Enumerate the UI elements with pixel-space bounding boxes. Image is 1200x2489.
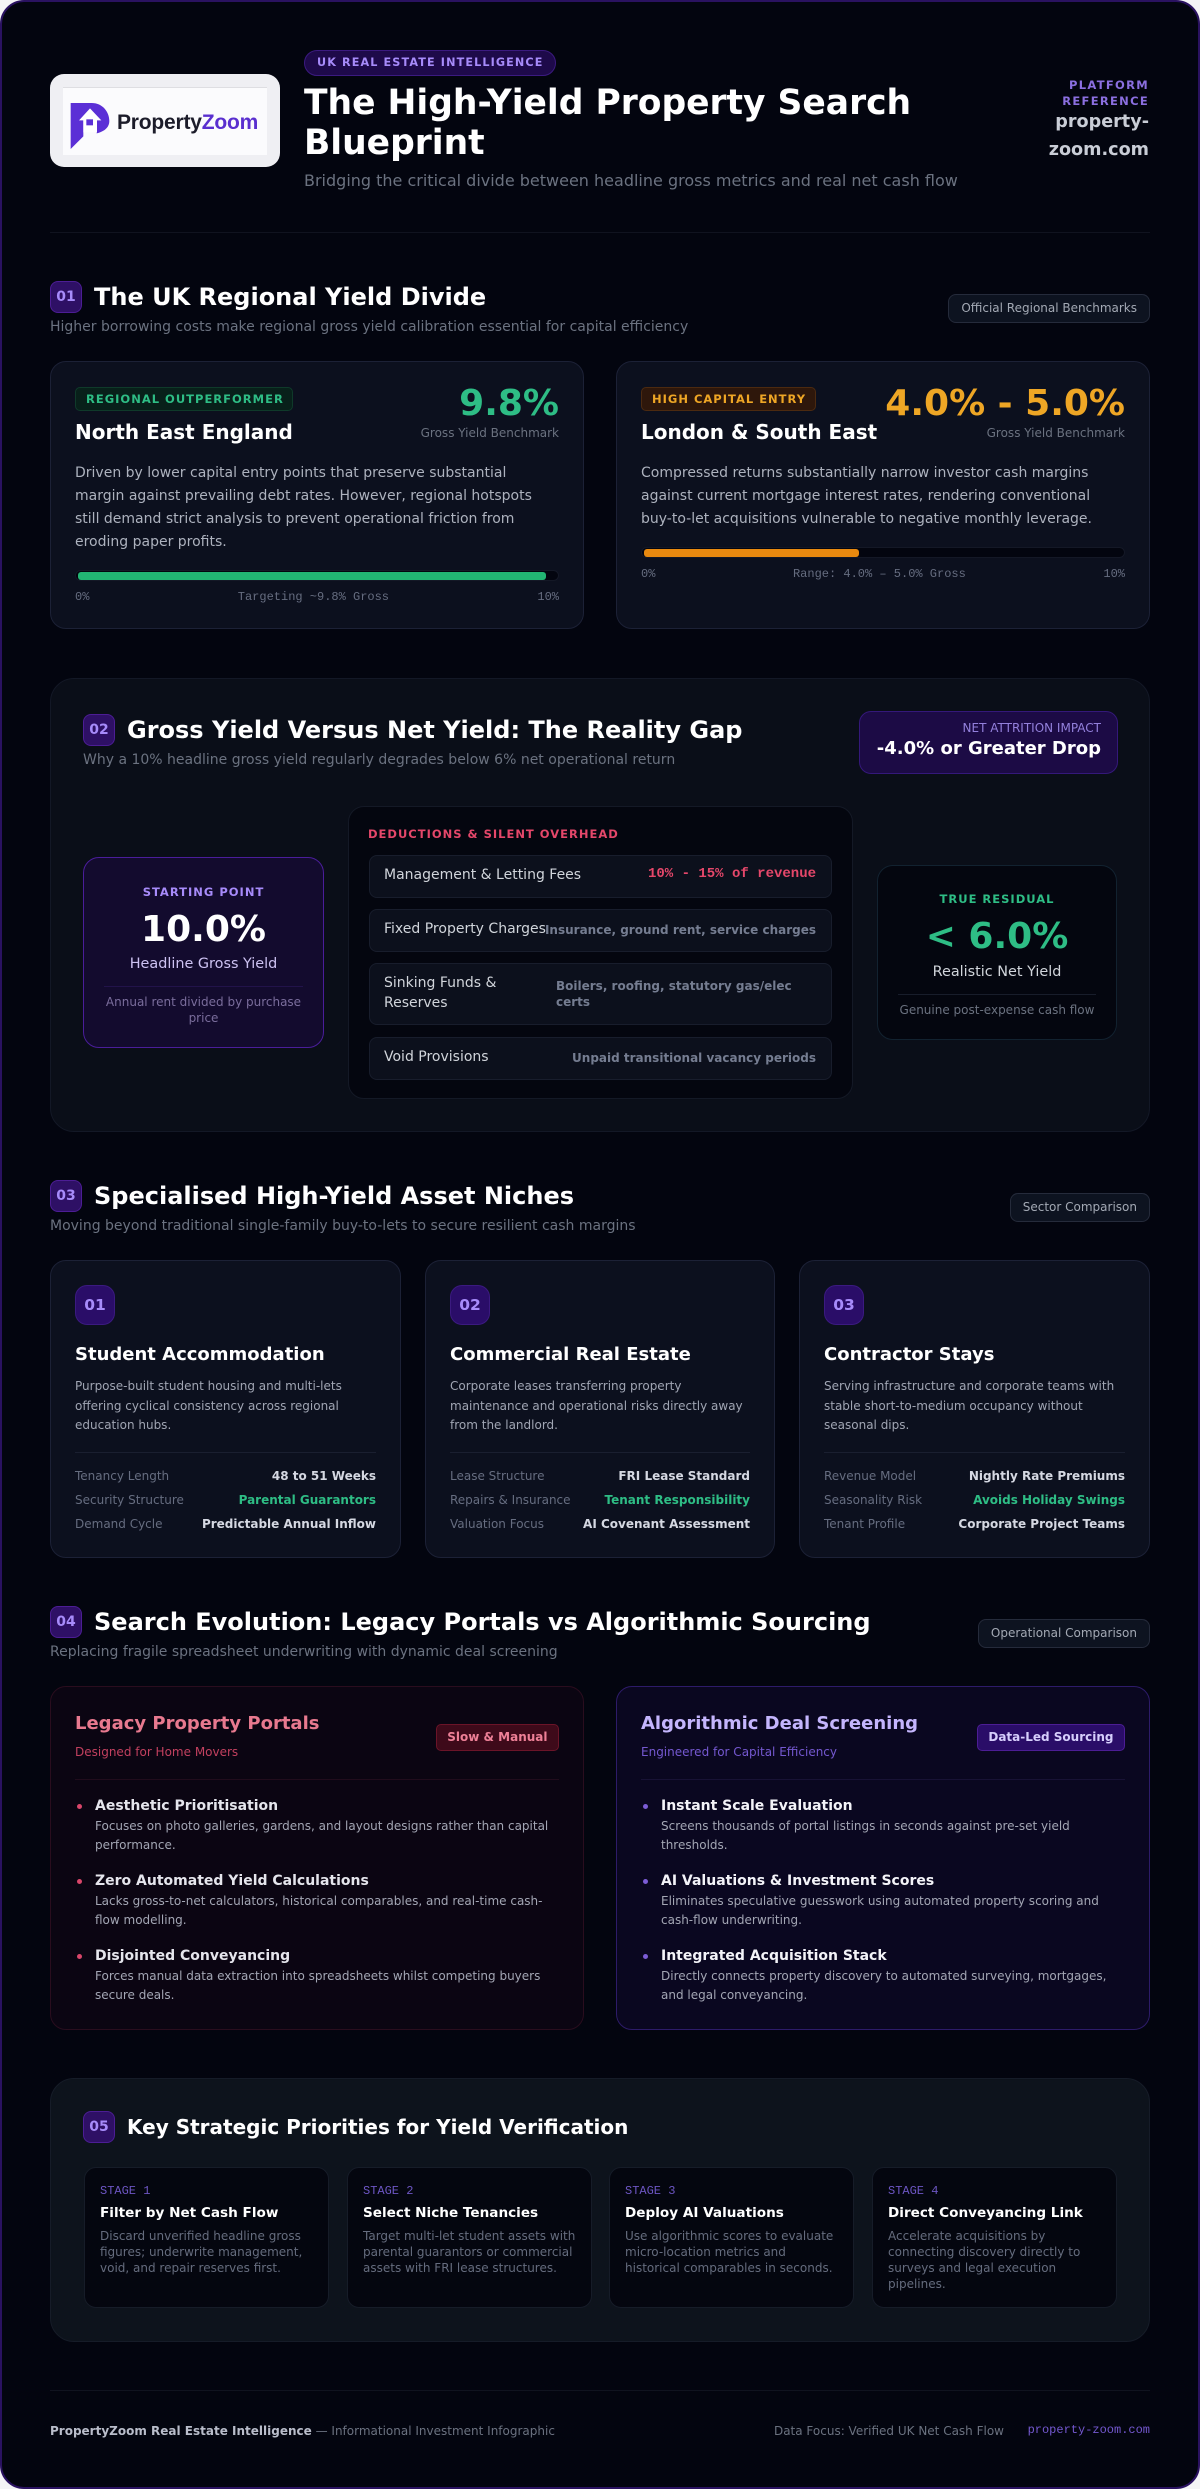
algorithmic badge: Data-Led Sourcing [988, 1730, 1114, 1744]
item heading: Zero Automated Yield Calculations [95, 1873, 369, 1889]
yield value: 4.0% - 5.0% [885, 383, 1125, 424]
residual label: TRUE RESIDUAL [940, 892, 1054, 906]
stage text: assets with FRI lease structures. [363, 2261, 557, 2275]
label [384, 975, 496, 1011]
progress bar [75, 570, 559, 581]
section 02: gross versus net panel [50, 678, 1150, 1132]
metric: Repairs & Insurance [450, 1493, 571, 1507]
deduction: fixed charges [369, 909, 832, 952]
item: instant scale [643, 1798, 1070, 1852]
stage text: historical comparables in seconds. [625, 2261, 833, 2275]
description: Driven by lower capital entry points that preserve substantial [75, 465, 506, 481]
footer left text: PropertyZoom Real Estate Intelligence — Informational Investment Infographic [50, 2424, 555, 2438]
net yield value: < 6.0% [926, 916, 1068, 957]
niche name: Student Accommodation [75, 1344, 325, 1365]
outperformer badge: REGIONAL OUTPERFORMER [86, 392, 284, 406]
item: aesthetic prioritisation [77, 1798, 548, 1852]
item text [661, 1819, 1070, 1852]
platform reference text: REFERENCE [1062, 94, 1149, 108]
bullet [643, 1879, 648, 1884]
description: Compressed returns substantially narrow investor cash margins [641, 465, 1088, 481]
description [75, 465, 532, 550]
gross yield value: 10.0% [141, 909, 266, 950]
section number: 05 [89, 2119, 109, 2135]
header logo card [50, 74, 280, 167]
deduction: sinking funds [369, 963, 832, 1025]
bar labels: 0% [641, 567, 655, 581]
niche card: commercial [425, 1260, 775, 1558]
gross definition [106, 995, 301, 1025]
section number: 03 [56, 1188, 76, 1204]
description: still demand strict analysis to prevent operational friction from [75, 511, 514, 527]
metric value: Tenant Responsibility [605, 1493, 750, 1507]
stage name: Direct Conveyancing Link [888, 2205, 1083, 2221]
card divider [75, 1452, 376, 1453]
stage 3 [609, 2167, 854, 2308]
section subtitle: Higher borrowing costs make regional gross yield calibration essential for capital efficiency [50, 319, 688, 335]
item text: Forces manual data extraction into spreadsheets whilst competing buyers [95, 1969, 540, 1983]
tag: Official Regional Benchmarks [961, 301, 1137, 315]
item text: secure deals. [95, 1988, 174, 2002]
niche name: Commercial Real Estate [450, 1344, 691, 1365]
niche card: contractor [799, 1260, 1150, 1558]
item heading: Aesthetic Prioritisation [95, 1798, 278, 1814]
region name: North East England [75, 420, 293, 444]
tag: Sector Comparison [1023, 1200, 1137, 1214]
stage 2 [347, 2167, 592, 2308]
bar labels: 10% [1103, 567, 1125, 581]
item text: flow modelling. [95, 1913, 187, 1927]
platform reference text: PLATFORM [1069, 78, 1149, 92]
item heading: Integrated Acquisition Stack [661, 1948, 887, 1964]
value: Unpaid transitional vacancy periods [572, 1051, 816, 1065]
header eyebrow badge [304, 50, 556, 76]
metric value: 48 to 51 Weeks [272, 1469, 376, 1483]
item: integrated stack [643, 1948, 1106, 2002]
metric value: AI Covenant Assessment [583, 1517, 750, 1531]
niche description [450, 1379, 743, 1432]
stage text: Target multi-let student assets with [363, 2229, 575, 2243]
metric value: FRI Lease Standard [618, 1469, 750, 1483]
footer divider [50, 2390, 1150, 2391]
section number [83, 714, 115, 746]
stage label: STAGE 3 [625, 2184, 675, 2198]
section heading: Gross Yield Versus Net Yield: The Reality Gap [127, 716, 742, 744]
niche description: Corporate leases transferring property [450, 1379, 681, 1393]
bar labels: 0% [75, 590, 89, 604]
platform reference text: zoom.com [1049, 140, 1149, 160]
section heading: Search Evolution: Legacy Portals vs Algorithmic Sourcing [94, 1608, 871, 1636]
number icon [450, 1285, 490, 1325]
stage text: connecting discovery directly to [888, 2245, 1080, 2259]
metric value: Nightly Rate Premiums [969, 1469, 1125, 1483]
gross definition: Annual rent divided by purchase [106, 995, 301, 1009]
niche description: Purpose-built student housing and multi-lets [75, 1379, 342, 1393]
item text: Screens thousands of portal listings in seconds against pre-set yield [661, 1819, 1070, 1833]
stage 1 [84, 2167, 329, 2308]
bar labels [75, 590, 559, 604]
label: Sinking Funds & [384, 975, 496, 991]
niche description: education hubs. [75, 1418, 171, 1432]
bullet [77, 1954, 82, 1959]
high capital badge: HIGH CAPITAL ENTRY [652, 392, 806, 406]
stage text: micro-location metrics and [625, 2245, 786, 2259]
stage text: Use algorithmic scores to evaluate [625, 2229, 833, 2243]
item text: cash-flow underwriting. [661, 1913, 802, 1927]
yield label: Gross Yield Benchmark [987, 426, 1125, 440]
metric: Revenue Model [824, 1469, 916, 1483]
starting point card [83, 857, 324, 1048]
card divider [898, 994, 1096, 995]
comparison card: legacy portals [50, 1686, 584, 2030]
label: Void Provisions [384, 1049, 489, 1065]
number icon: 02 [459, 1296, 481, 1314]
true residual card [877, 865, 1117, 1040]
high capital badge [641, 387, 816, 411]
metric: Seasonality Risk [824, 1493, 922, 1507]
legacy title: Legacy Property Portals [75, 1713, 319, 1734]
metric value: Avoids Holiday Swings [973, 1493, 1125, 1507]
section heading: Specialised High-Yield Asset Niches [94, 1182, 574, 1210]
section subtitle: Moving beyond traditional single-family buy-to-lets to secure resilient cash margins [50, 1218, 636, 1234]
gross yield label: Headline Gross Yield [130, 956, 277, 972]
number icon: 01 [84, 1296, 106, 1314]
niche card: student [50, 1260, 401, 1558]
value: Boilers, roofing, statutory gas/elec [556, 979, 792, 993]
item text [661, 1894, 1099, 1927]
niche description [824, 1379, 1114, 1432]
stage text [100, 2229, 302, 2275]
number icon: 03 [833, 1296, 855, 1314]
description: buy-to-let acquisitions vulnerable to negative monthly leverage. [641, 511, 1092, 527]
item heading: Instant Scale Evaluation [661, 1798, 853, 1814]
progress bar [641, 547, 1125, 558]
callout label: NET ATTRITION IMPACT [963, 721, 1101, 735]
metric: Valuation Focus [450, 1517, 544, 1531]
section number: 02 [89, 722, 109, 738]
niche description: Serving infrastructure and corporate teams with [824, 1379, 1114, 1393]
callout value: -4.0% or Greater Drop [877, 738, 1101, 759]
item text: and legal conveyancing. [661, 1988, 807, 2002]
section heading: The UK Regional Yield Divide [94, 283, 486, 311]
algorithmic badge [977, 1724, 1125, 1751]
description: against current mortgage interest rates, rendering conventional [641, 488, 1090, 504]
section number: 01 [56, 289, 76, 305]
stage text: figures; underwrite management, [100, 2245, 302, 2259]
bar labels: 10% [537, 590, 559, 604]
stage text: parental guarantors or commercial [363, 2245, 572, 2259]
starting label: STARTING POINT [143, 885, 264, 899]
item text [661, 1969, 1106, 2002]
net yield label: Realistic Net Yield [933, 964, 1061, 980]
bullet [77, 1804, 82, 1809]
main title [304, 83, 911, 163]
niche name: Contractor Stays [824, 1344, 994, 1365]
legacy badge: Slow & Manual [447, 1730, 548, 1744]
footer url: property-zoom.com [1028, 2423, 1150, 2437]
metric value: Parental Guarantors [239, 1493, 376, 1507]
deduction: management fees [369, 855, 832, 898]
stage name: Deploy AI Valuations [625, 2205, 784, 2221]
section heading: Key Strategic Priorities for Yield Verification [127, 2115, 628, 2139]
metric value: Predictable Annual Inflow [202, 1517, 376, 1531]
item text: performance. [95, 1838, 176, 1852]
metric: Security Structure [75, 1493, 184, 1507]
stage name: Filter by Net Cash Flow [100, 2205, 278, 2221]
niche description: seasonal dips. [824, 1418, 909, 1432]
net definition: Genuine post-expense cash flow [900, 1003, 1094, 1017]
region name: London & South East [641, 420, 877, 444]
footer data focus: Data Focus: Verified UK Net Cash Flow [774, 2424, 1004, 2438]
bullet [643, 1804, 648, 1809]
value: Insurance, ground rent, service charges [545, 923, 816, 937]
stage text [625, 2229, 833, 2275]
label: Fixed Property Charges [384, 921, 546, 937]
section 03: asset niches [50, 1180, 1150, 1558]
tag: Operational Comparison [991, 1626, 1137, 1640]
stage text [363, 2229, 575, 2275]
item text: Eliminates speculative guesswork using automated property scoring and [661, 1894, 1099, 1908]
item: AI valuations [643, 1873, 1099, 1927]
stage text: Discard unverified headline gross [100, 2229, 301, 2243]
card divider [104, 986, 303, 987]
section number [83, 2111, 115, 2143]
stage text: surveys and legal execution [888, 2261, 1056, 2275]
niche description: stable short-to-medium occupancy without [824, 1398, 1083, 1412]
section subtitle: Why a 10% headline gross yield regularly degrades below 6% net operational return [83, 752, 675, 768]
card divider [450, 1452, 750, 1453]
metric: Tenant Profile [824, 1517, 905, 1531]
stage label: STAGE 2 [363, 2184, 413, 2198]
value: 10% - 15% of revenue [648, 866, 816, 882]
number icon [75, 1285, 115, 1325]
yield label: Gross Yield Benchmark [421, 426, 559, 440]
yield value: 9.8% [459, 383, 559, 424]
stage text: pipelines. [888, 2277, 946, 2291]
description [641, 465, 1092, 527]
platform reference text: property- [1055, 112, 1149, 132]
bar labels: Range: 4.0% – 5.0% Gross [793, 567, 966, 581]
card divider [75, 1779, 559, 1780]
bullet [77, 1879, 82, 1884]
bar labels [641, 567, 1125, 581]
metric value: Corporate Project Teams [958, 1517, 1125, 1531]
item heading: Disjointed Conveyancing [95, 1948, 290, 1964]
logo wordmark: PropertyZoom [117, 111, 258, 134]
stage text [888, 2229, 1080, 2291]
section subtitle: Replacing fragile spreadsheet underwriting with dynamic deal screening [50, 1644, 558, 1660]
deductions panel [348, 806, 853, 1099]
value [556, 979, 792, 1009]
item text [95, 1894, 542, 1927]
bullet [643, 1954, 648, 1959]
section 04: search evolution [50, 1606, 1150, 2030]
stage text: void, and repair reserves first. [100, 2261, 281, 2275]
card: North East England [50, 361, 584, 629]
description: eroding paper profits. [75, 534, 227, 550]
item text: Focuses on photo galleries, gardens, and layout designs rather than capital [95, 1819, 548, 1833]
main title: The High-Yield Property Search [304, 83, 911, 123]
metric: Tenancy Length [75, 1469, 169, 1483]
stage label: STAGE 1 [100, 2184, 150, 2198]
algorithmic title: Algorithmic Deal Screening [641, 1713, 918, 1734]
tag [1010, 1193, 1150, 1222]
card: London & South East [616, 361, 1150, 629]
item text [95, 1969, 540, 2002]
value: certs [556, 995, 590, 1009]
tag [948, 294, 1150, 323]
section number [50, 281, 82, 313]
item text [95, 1819, 548, 1852]
stage 4 [872, 2167, 1117, 2308]
number icon [824, 1285, 864, 1325]
item: disjointed conveyancing [77, 1948, 540, 2002]
icon: PropertyZoom house P [70, 103, 110, 149]
section 05: strategic priorities panel [50, 2078, 1150, 2342]
item text: Lacks gross-to-net calculators, historical comparables, and real-time cash- [95, 1894, 542, 1908]
bar labels: Targeting ~9.8% Gross [238, 590, 389, 604]
stage text: Accelerate acquisitions by [888, 2229, 1045, 2243]
niche description: from the landlord. [450, 1418, 558, 1432]
gross definition: price [189, 1011, 218, 1025]
deduction: void provisions [369, 1037, 832, 1080]
stage label: STAGE 4 [888, 2184, 938, 2198]
item heading: AI Valuations & Investment Scores [661, 1873, 934, 1889]
item: zero automated yield [77, 1873, 542, 1927]
item text: thresholds. [661, 1838, 728, 1852]
header eyebrow badge: UK REAL ESTATE INTELLIGENCE [317, 56, 544, 69]
niche description [75, 1379, 342, 1432]
platform reference text [1049, 78, 1149, 160]
main title: Blueprint [304, 123, 485, 163]
niche description: maintenance and operational risks directly away [450, 1398, 743, 1412]
header divider [50, 232, 1150, 233]
section number [50, 1180, 82, 1212]
section number [50, 1606, 82, 1638]
label: Management & Letting Fees [384, 867, 581, 883]
comparison card: algorithmic screening [616, 1686, 1150, 2030]
label: Reserves [384, 995, 448, 1011]
card divider [641, 1779, 1125, 1780]
stage name: Select Niche Tenancies [363, 2205, 538, 2221]
niche description: offering cyclical consistency across regional [75, 1398, 339, 1412]
logo inner plate [63, 87, 267, 155]
header subtitle: Bridging the critical divide between headline gross metrics and real net cash flow [304, 171, 958, 190]
card divider [824, 1452, 1125, 1453]
algorithmic subtitle: Engineered for Capital Efficiency [641, 1745, 837, 1759]
metric: Demand Cycle [75, 1517, 162, 1531]
description: margin against prevailing debt rates. However, regional hotspots [75, 488, 532, 504]
legacy badge [436, 1724, 559, 1751]
legacy subtitle: Designed for Home Movers [75, 1745, 238, 1759]
net attrition callout [859, 711, 1118, 774]
deductions heading: DEDUCTIONS & SILENT OVERHEAD [368, 827, 619, 841]
outperformer badge [75, 387, 293, 411]
item text: Directly connects property discovery to automated surveying, mortgages, [661, 1969, 1106, 1983]
section number: 04 [56, 1614, 76, 1630]
metric: Lease Structure [450, 1469, 544, 1483]
section 01: regional yield divide [50, 281, 1150, 629]
tag [978, 1619, 1150, 1648]
